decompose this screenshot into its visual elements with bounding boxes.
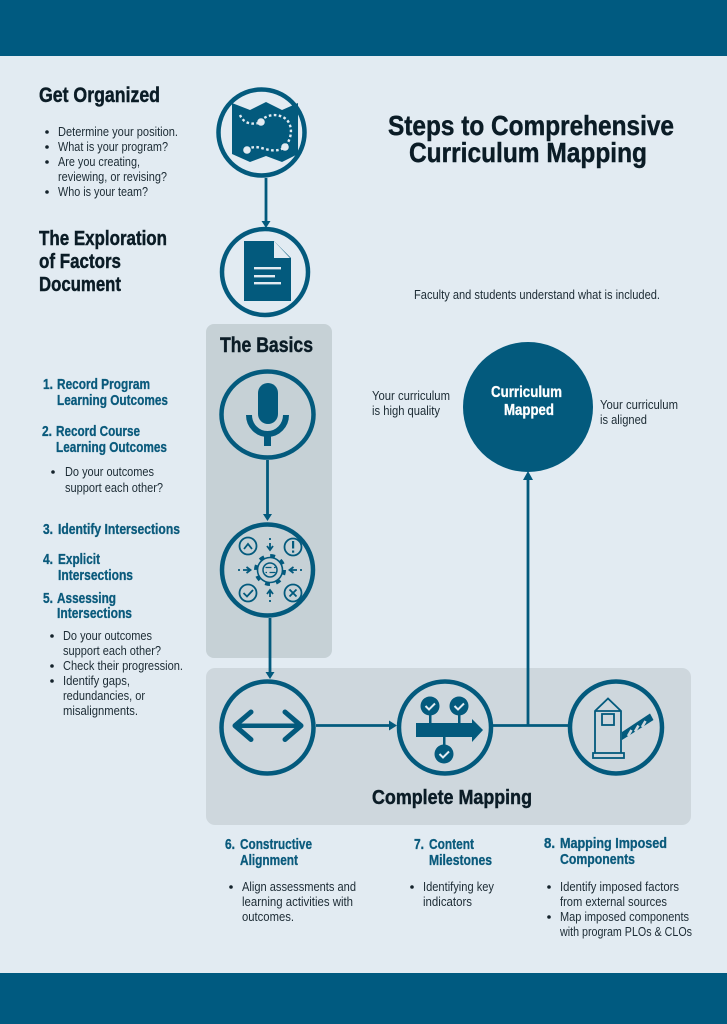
step 8: [544, 836, 667, 868]
step 6: [225, 837, 312, 869]
panel: The Basics: [206, 324, 332, 658]
list: step 7: Identifying key: [423, 880, 495, 894]
arrow: gear to alignment: [266, 618, 274, 679]
circle: Curriculum Mapped: Curriculum: [491, 384, 562, 401]
step 2: [42, 424, 167, 456]
heading: The Exploration of Factors Document: The Exploration: [39, 228, 167, 250]
list: step 5: misalignments.: [63, 704, 138, 718]
arrow: alignment to milestones: [316, 720, 397, 730]
heading: The Basics: The Basics: [220, 334, 313, 357]
step 6: 6.: [225, 837, 235, 853]
list: step 5: support each other?: [63, 644, 161, 658]
list: step 6: Align assessments and: [242, 880, 356, 894]
text: faculty and students: Faculty and students understand what is included.: [414, 288, 660, 302]
icon: double arrow: [222, 682, 314, 774]
circle: Curriculum Mapped: [463, 342, 593, 472]
heading: The Exploration of Factors Document: [39, 228, 167, 296]
icon: microphone: [222, 372, 314, 458]
step 7: Milestones: [429, 853, 492, 869]
step 2: Record Course: [56, 424, 140, 440]
list: Get Organized: Determine your position.: [58, 125, 178, 139]
bottom band: [0, 973, 727, 1024]
icon: gear with arrows: [222, 524, 313, 616]
list: Get Organized: Are you creating,: [58, 155, 140, 169]
step 8: 8.: [544, 836, 555, 852]
heading: The Exploration of Factors Document: Document: [39, 274, 121, 296]
step 4: Intersections: [58, 568, 133, 584]
step 2: 2.: [42, 424, 52, 440]
title: Steps to Comprehensive: [388, 110, 674, 141]
title: Curriculum Mapping: [409, 137, 647, 168]
panel: Complete Mapping: [206, 668, 691, 825]
icon: gate booth: [570, 682, 662, 774]
step 4: Explicit: [58, 552, 100, 568]
step 2: Learning Outcomes: [56, 440, 167, 456]
text: aligned: [600, 398, 678, 427]
list: Get Organized: [45, 125, 178, 199]
step 5: [43, 591, 132, 622]
arrow: curriculum mapped riser: [523, 471, 533, 726]
list: step 7: [410, 880, 495, 909]
list: step 8: Map imposed components: [560, 910, 689, 924]
step 1: Learning Outcomes: [57, 393, 168, 409]
step 8: Components: [560, 852, 635, 868]
step 7: [414, 837, 492, 869]
arrow: map to document: [262, 178, 270, 228]
list: step 2: support each other?: [65, 481, 163, 495]
text: high quality: is high quality: [372, 404, 441, 418]
text: aligned: Your curriculum: [600, 398, 678, 412]
heading: Complete Mapping: Complete Mapping: [372, 786, 532, 809]
step 4: 4.: [43, 552, 53, 568]
list: step 8: Identify imposed factors: [560, 880, 679, 894]
text: aligned: is aligned: [600, 413, 647, 427]
list: step 8: with program PLOs & CLOs: [559, 925, 692, 939]
list: Get Organized: reviewing, or revising?: [58, 170, 167, 184]
list: step 2: Do your outcomes: [65, 465, 154, 479]
step 6: Alignment: [240, 853, 298, 869]
list: step 5: Identify gaps,: [63, 674, 130, 688]
heading: Get Organized: Get Organized: [39, 84, 160, 107]
icon: map: [218, 90, 304, 176]
list: step 6: learning activities with: [242, 895, 353, 909]
step 5: 5.: [43, 591, 53, 607]
step 1: Record Program: [57, 377, 150, 393]
step 7: 7.: [414, 837, 424, 853]
icon: document: [222, 229, 308, 315]
step 1: [43, 377, 168, 409]
list: step 6: outcomes.: [242, 910, 294, 924]
step 7: Content: [429, 837, 474, 853]
list: Get Organized: What is your program?: [58, 140, 168, 154]
list: step 5: Do your outcomes: [63, 629, 152, 643]
list: step 5: Check their progression.: [63, 659, 183, 673]
circle: Curriculum Mapped: Mapped: [504, 402, 554, 419]
arrow: microphone to gear: [263, 460, 272, 521]
text: high quality: [372, 389, 450, 418]
top band: [0, 0, 727, 56]
step 6: Constructive: [240, 837, 312, 853]
step 4: [43, 552, 133, 584]
step 8: Mapping Imposed: [560, 836, 667, 852]
list: step 7: indicators: [423, 895, 472, 909]
text: high quality: Your curriculum: [372, 389, 450, 403]
list: step 5: [50, 629, 183, 718]
heading: The Exploration of Factors Document: of Factors: [39, 251, 121, 273]
title: [388, 110, 674, 168]
list: step 8: [547, 880, 692, 939]
list: step 5: redundancies, or: [63, 689, 145, 703]
list: step 2: [51, 465, 163, 495]
icon: milestones: [399, 682, 491, 774]
step 5: Intersections: [57, 606, 132, 622]
connector: milestones to imposed components: [493, 724, 568, 727]
step 5: Assessing: [57, 591, 116, 607]
step 3: 3.: [43, 522, 53, 538]
step 1: 1.: [43, 377, 53, 393]
step 3: Identify Intersections: [58, 522, 180, 538]
list: Get Organized: Who is your team?: [58, 185, 148, 199]
list: step 6: [229, 880, 356, 924]
list: step 8: from external sources: [560, 895, 667, 909]
